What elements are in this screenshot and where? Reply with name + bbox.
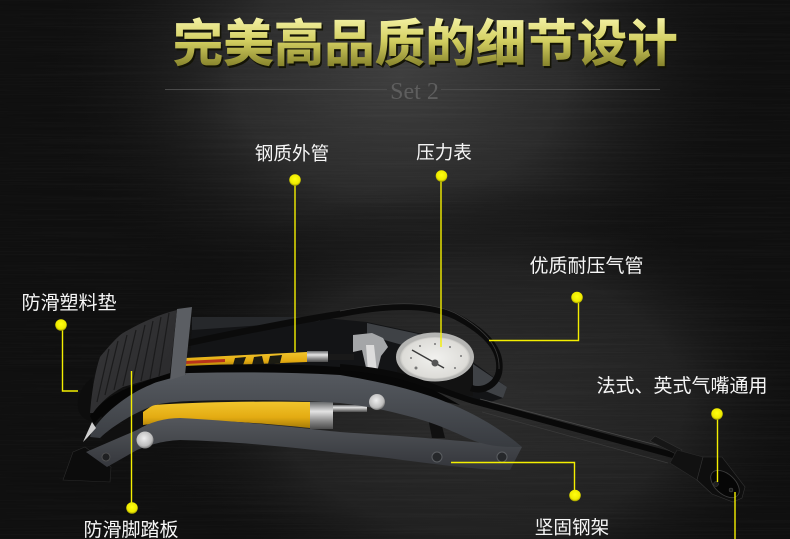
callout: 法式、英式气嘴通用 [596, 375, 768, 482]
callout: 防滑塑料垫: 防滑塑料垫 [21, 292, 117, 314]
foot pump illustration [63, 304, 745, 503]
title: 完美高品质的细节设计 [173, 16, 678, 72]
pump: air hose loop [188, 307, 499, 389]
pump: gauge [396, 332, 474, 396]
callout: 防滑脚踏板 [83, 371, 179, 539]
callout: 钢质外管 [255, 143, 329, 352]
title: 完美高品质的细节设计 [174, 18, 680, 74]
pump: chrome tip [83, 422, 96, 442]
pump: black foot [63, 447, 111, 482]
pump: bolts [102, 394, 507, 462]
callout: 防滑塑料垫 [21, 292, 117, 391]
pump: upper steel arm [90, 372, 522, 447]
callout: 优质耐压气管 [489, 255, 644, 340]
callout: 坚固钢架 [451, 462, 609, 538]
pump: rubber pedal pad [90, 310, 177, 413]
callout: 优质耐压气管: 优质耐压气管 [529, 255, 644, 277]
pump: air nozzle [650, 436, 745, 503]
callout line: nozzle lower pointer [734, 492, 736, 539]
pump: black gap under pedal [90, 374, 186, 424]
pump: chrome bracket [353, 333, 388, 372]
callout: 法式、英式气嘴通用: 法式、英式气嘴通用 [596, 375, 768, 397]
pump: long outlet hose [340, 367, 680, 457]
pump: rear frame [190, 317, 507, 405]
pump: black rail above upper arm [100, 364, 460, 425]
pump: grab handle [78, 378, 97, 421]
callout: 压力表: 压力表 [416, 142, 472, 163]
pump: lower yellow cylinder [143, 402, 367, 429]
callout: 钢质外管: 钢质外管 [255, 143, 329, 164]
pump: pedal plate [170, 307, 192, 380]
pump: upper yellow cylinder [185, 351, 354, 367]
pump: lower steel arm [86, 418, 522, 470]
callout: 坚固钢架: 坚固钢架 [535, 517, 609, 538]
subtitle: Set 2: Set 2 [390, 79, 439, 105]
callout: 压力表 [416, 142, 472, 347]
pump: dark inner struts [100, 413, 143, 447]
